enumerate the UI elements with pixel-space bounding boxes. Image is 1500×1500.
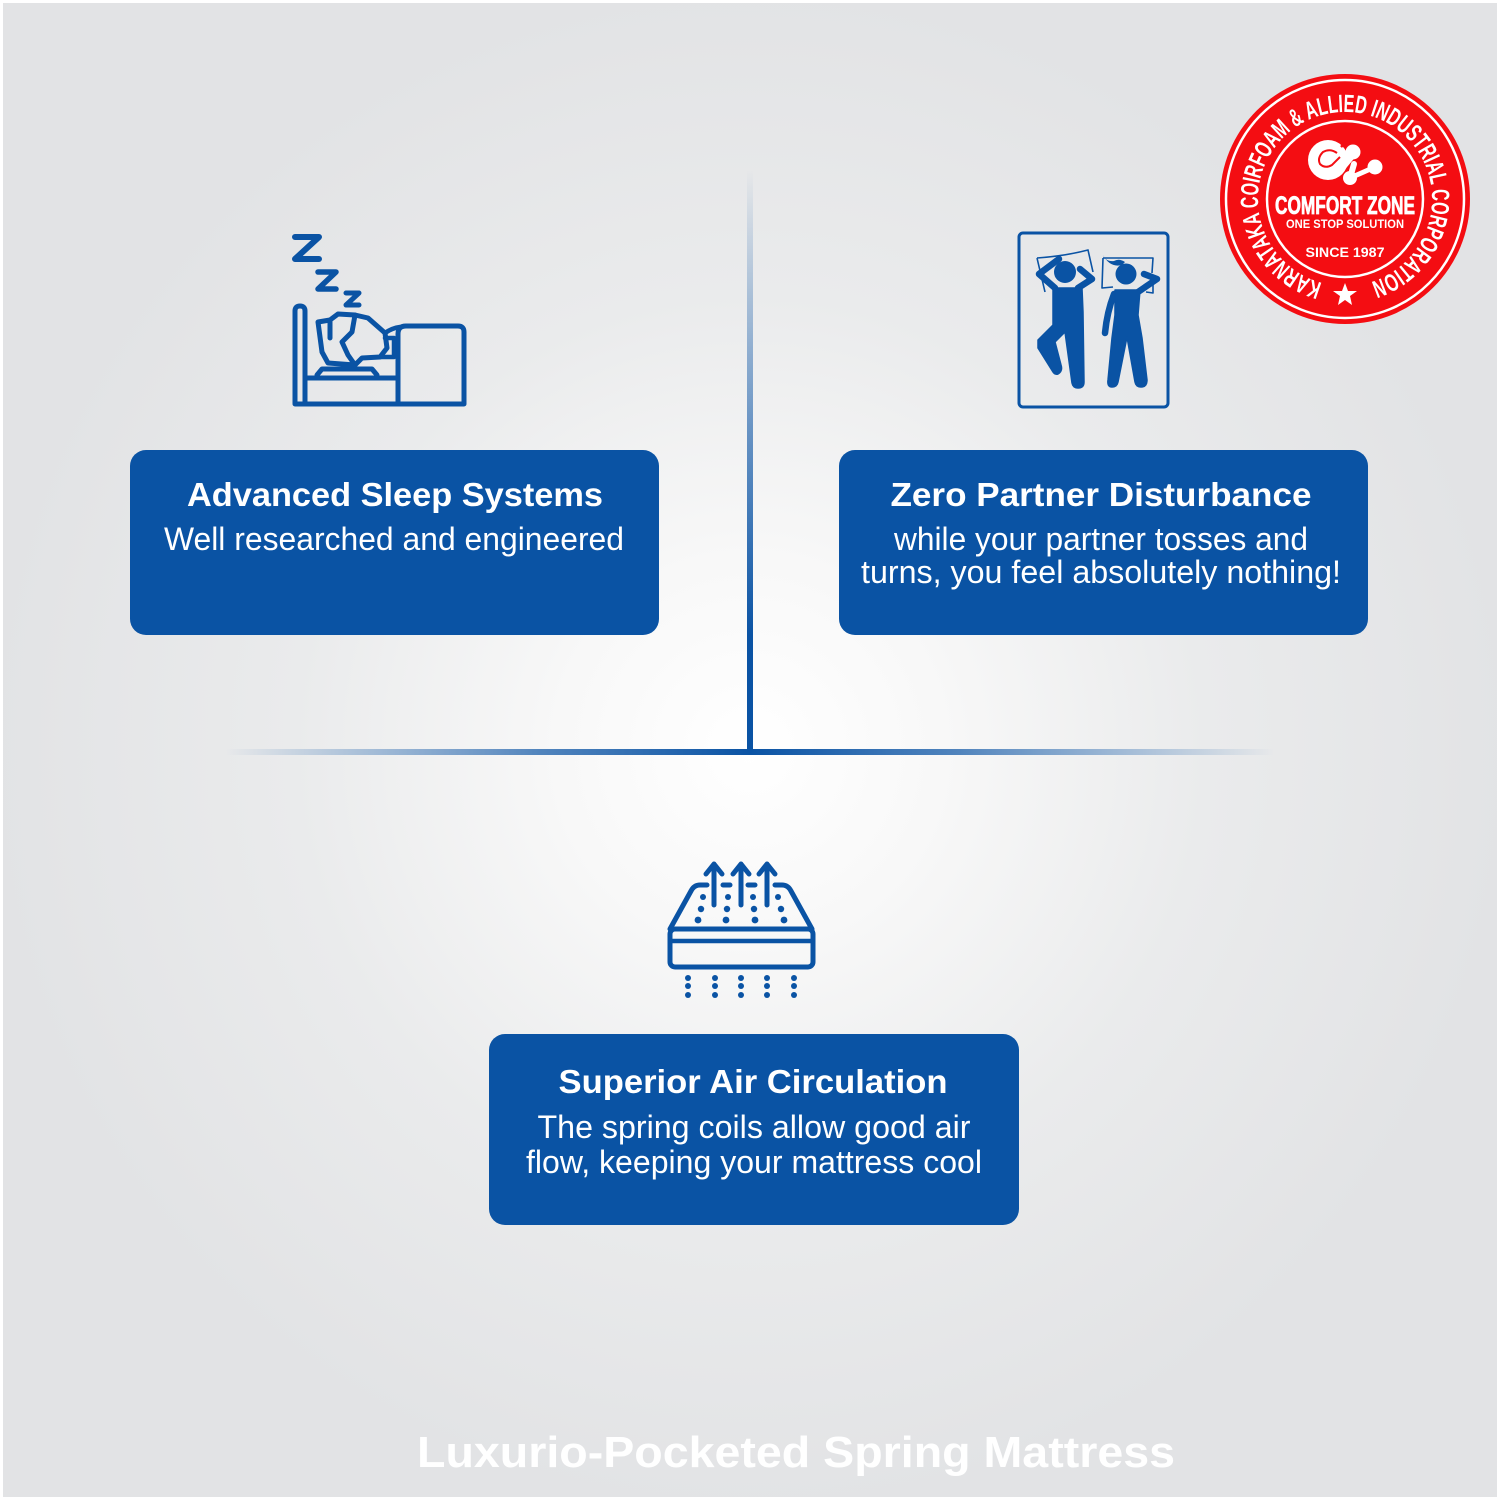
- icon: mattress with airflow: [670, 864, 813, 998]
- body text: while your partner tosses and: [893, 521, 1308, 557]
- icon: sleeping person in bed: [295, 237, 464, 404]
- panel: Superior Air Circulation: [489, 1034, 1019, 1225]
- body text: [526, 1109, 982, 1180]
- heading: Superior Air Circulation: [558, 1063, 948, 1100]
- body text: Well researched and engineered: [164, 521, 624, 557]
- heading: Zero Partner Disturbance: [890, 476, 1312, 513]
- panel: Advanced Sleep Systems: [130, 450, 659, 635]
- badge: Comfort Zone seal: [1220, 74, 1470, 324]
- horizontal divider: [225, 749, 1275, 755]
- man figure: [1038, 259, 1092, 388]
- body text: [861, 521, 1341, 590]
- woman figure: [1103, 255, 1157, 387]
- panel: Zero Partner Disturbance: [839, 450, 1368, 635]
- body text: The spring coils allow good air: [538, 1109, 971, 1145]
- tagline: ONE STOP SOLUTION: [1286, 219, 1404, 231]
- title: Luxurio-Pocketed Spring Mattress: [417, 1428, 1175, 1477]
- ring text: KARNATAKA COIRFOAM & ALLIED INDUSTRIAL CORPORATION: [1240, 94, 1450, 299]
- vertical divider: [747, 170, 753, 752]
- since label: SINCE 1987: [1306, 244, 1385, 260]
- body text: flow, keeping your mattress cool: [526, 1144, 982, 1180]
- body text: turns, you feel absolutely nothing!: [861, 554, 1341, 590]
- brand name: COMFORT ZONE: [1275, 192, 1415, 220]
- heading: Advanced Sleep Systems: [187, 476, 603, 513]
- logo mark: [1308, 140, 1382, 185]
- icon: two partners on a mattress: [1019, 233, 1168, 407]
- icon: star: [1333, 283, 1357, 305]
